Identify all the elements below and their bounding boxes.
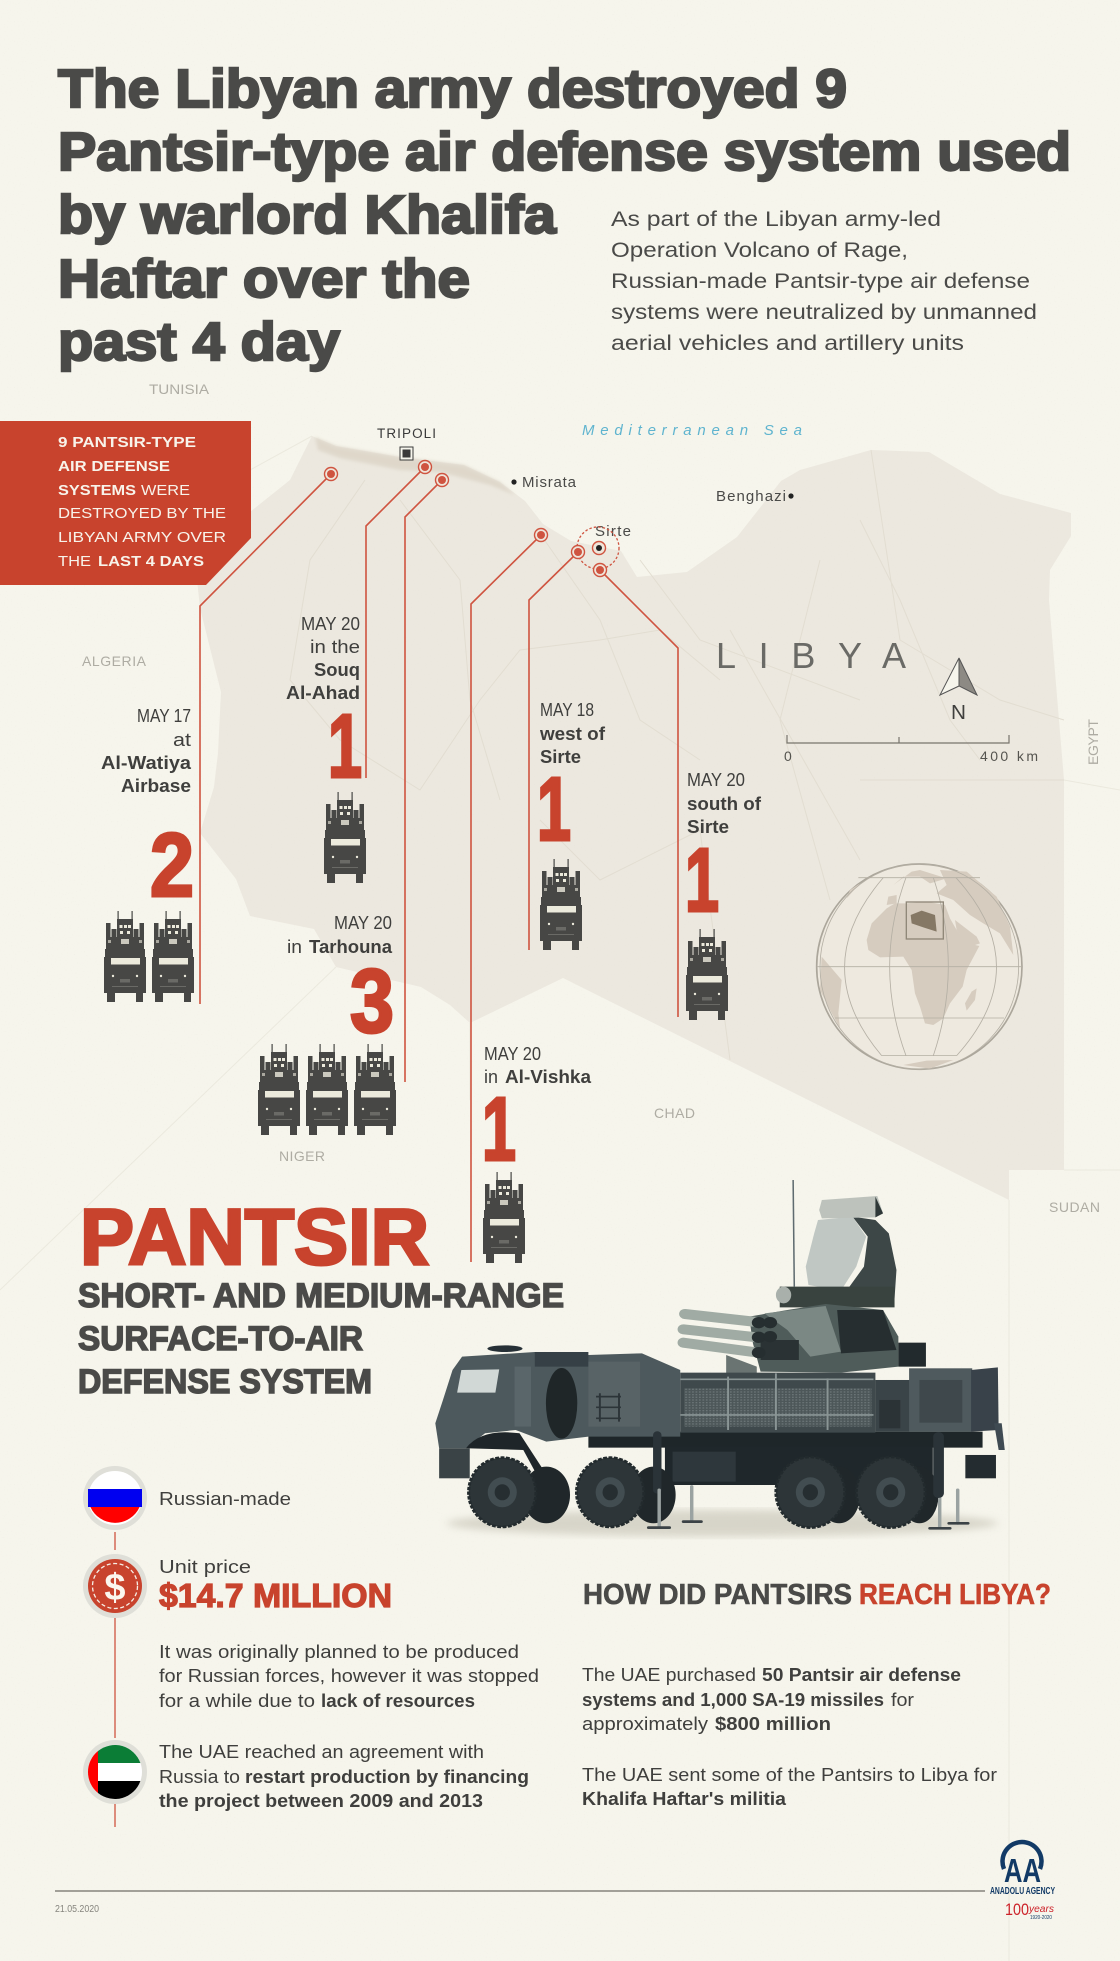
callout: destroyed systems: LIBYAN ARMY OVER — [58, 529, 226, 546]
map place labels: ALGERIA — [82, 653, 147, 669]
map place labels: Mediterranean Sea — [582, 422, 802, 439]
event: south of Sirte: south of — [687, 794, 762, 814]
icon: Russian flag — [83, 1466, 147, 1530]
radar — [776, 1180, 896, 1307]
text block: UAE agreement: The UAE reached an agreement with — [159, 1742, 484, 1762]
subtitle text: aerial vehicles and artillery units — [611, 332, 964, 355]
event: west of Sirte: Sirte — [540, 747, 581, 767]
heading: Pantsir: SHORT- AND MEDIUM-RANGE — [78, 1277, 564, 1315]
map place labels: Misrata — [522, 474, 577, 491]
label: Tunisia: TUNISIA — [149, 381, 210, 397]
map place labels: Benghazi — [716, 488, 786, 505]
text block: production history: lack of resources — [321, 1691, 475, 1711]
subtitle text — [611, 208, 1037, 355]
scale bar: 0 — [784, 748, 792, 764]
text block: UAE purchase: 50 Pantsir air defense — [762, 1665, 961, 1685]
heading: Pantsir: PANTSIR — [80, 1192, 429, 1281]
turret — [726, 1304, 926, 1373]
text block: production history: for Russian forces, however it was stopped — [159, 1666, 539, 1686]
callout: destroyed systems: 9 PANTSIR-TYPE — [58, 434, 196, 451]
text block: production history: It was originally planned to be produced — [159, 1642, 519, 1662]
icon: dollar coin: $ — [104, 1567, 126, 1609]
callout: destroyed systems — [0, 421, 251, 585]
text block: production history — [159, 1642, 539, 1711]
event: Tarhouna: in — [287, 937, 302, 957]
event: Al-Vishka: 1 — [482, 1080, 516, 1180]
heading: Pantsir: SURFACE-TO-AIR — [78, 1320, 363, 1358]
wheels — [469, 1457, 939, 1528]
heading: Pantsir: DEFENSE SYSTEM — [78, 1363, 372, 1401]
callout: destroyed systems: LAST 4 DAYS — [98, 553, 204, 570]
event: Souq Al-Ahad: Souq — [314, 660, 360, 680]
callout: destroyed systems: AIR DEFENSE — [58, 458, 170, 475]
title: Pantsir-type air defense system used — [58, 122, 1071, 182]
label: Russian-made: Russian-made — [159, 1489, 291, 1509]
text block: UAE sent Pantsirs — [582, 1765, 997, 1809]
text block: UAE purchase: $800 million — [715, 1714, 831, 1734]
footer: 21.05.2020 — [55, 1904, 99, 1915]
subtitle text: systems were neutralized by unmanned — [611, 301, 1037, 324]
title: The Libyan army destroyed 9 — [58, 59, 847, 119]
callout: destroyed systems: THE — [58, 553, 91, 570]
event: south of Sirte — [685, 770, 762, 1020]
heading: how did Pantsirs reach Libya — [583, 1579, 1051, 1611]
icon: north arrow: N — [951, 702, 966, 724]
map place labels: SUDAN — [1049, 1199, 1100, 1215]
missile launcher ends — [752, 1317, 777, 1358]
event: Souq Al-Ahad — [286, 614, 366, 883]
timeline connector — [114, 1532, 116, 1827]
unit price: Unit price — [159, 1557, 251, 1577]
event: Tarhouna: MAY 20 — [334, 913, 392, 933]
event: south of Sirte: 1 — [685, 831, 719, 931]
event: south of Sirte: Sirte — [687, 817, 729, 837]
map place labels: TRIPOLI — [377, 426, 436, 441]
event: Al-Watiya Airbase: 2 — [150, 816, 194, 916]
event: west of Sirte: west of — [539, 724, 606, 744]
icon: dollar coin — [83, 1554, 147, 1618]
event: south of Sirte: MAY 20 — [687, 770, 745, 790]
event: Al-Vishka: in — [484, 1067, 498, 1087]
missile tubes — [683, 1314, 757, 1352]
map place labels — [82, 422, 1101, 1215]
map place labels: Sirte — [595, 523, 631, 540]
scale bar — [784, 735, 1038, 764]
map place labels: EGYPT — [1085, 719, 1101, 765]
title: past 4 day — [58, 312, 340, 372]
title: Haftar over the — [58, 249, 470, 309]
chassis — [588, 1432, 983, 1448]
logo: Anadolu Agency: 100 — [1005, 1900, 1029, 1919]
map place labels: LIBYA — [716, 635, 906, 676]
map place labels: CHAD — [654, 1105, 695, 1121]
text block: UAE purchase: approximately — [582, 1714, 708, 1734]
event: Al-Watiya Airbase: MAY 17 — [137, 706, 191, 726]
map place labels: NIGER — [279, 1148, 325, 1164]
text block: UAE agreement: restart production by financing — [245, 1767, 529, 1787]
event: Al-Vishka — [482, 1044, 592, 1263]
icon: north arrow — [940, 658, 977, 724]
event: west of Sirte: 1 — [537, 760, 571, 860]
event: Tarhouna: Tarhouna — [309, 937, 393, 957]
callout: destroyed systems: SYSTEMS — [58, 482, 136, 499]
event: Souq Al-Ahad: Al-Ahad — [286, 683, 360, 703]
event: Al-Watiya Airbase: Al-Watiya — [101, 753, 192, 773]
text block: UAE agreement: Russia to — [159, 1767, 240, 1787]
cab — [435, 1345, 680, 1483]
text block: UAE purchase: systems and 1,000 SA-19 missiles — [582, 1690, 884, 1710]
title — [58, 59, 1071, 372]
callout: destroyed systems: WERE — [141, 482, 190, 499]
event: Al-Vishka: Al-Vishka — [505, 1067, 592, 1087]
text block: production history: for a while due to — [159, 1691, 315, 1711]
heading: how did Pantsirs reach Libya: HOW DID PANTSIRS — [583, 1579, 852, 1611]
heading: how did Pantsirs reach Libya: REACH LIBYA? — [859, 1579, 1051, 1611]
scale bar: 400 km — [980, 748, 1038, 764]
icon: UAE flag — [83, 1740, 147, 1804]
event: Al-Vishka: MAY 20 — [484, 1044, 541, 1064]
globe locator — [817, 864, 1022, 1069]
unit price: $14.7 MILLION — [159, 1577, 392, 1614]
event: Tarhouna: 3 — [350, 952, 394, 1052]
event: Tarhouna — [258, 913, 396, 1135]
event: west of Sirte — [537, 700, 606, 950]
logo: Anadolu Agency — [990, 1842, 1055, 1921]
event: Souq Al-Ahad: 1 — [328, 697, 362, 797]
logo: Anadolu Agency: AA — [1004, 1852, 1041, 1889]
cargo bed — [680, 1367, 1005, 1450]
unit price — [159, 1557, 392, 1614]
text block: UAE sent Pantsirs: Khalifa Haftar's militia — [582, 1789, 787, 1809]
text block: UAE purchase: for — [891, 1690, 914, 1710]
event: Al-Watiya Airbase — [101, 706, 194, 1002]
event: Souq Al-Ahad: MAY 20 — [301, 614, 360, 634]
leader lines and location pins — [200, 460, 678, 1262]
text block: UAE agreement: the project between 2009 and 2013 — [159, 1791, 483, 1811]
logo: Anadolu Agency: years — [1028, 1904, 1054, 1915]
text block: UAE agreement — [159, 1742, 529, 1811]
subtitle text: Russian-made Pantsir-type air defense — [611, 270, 1030, 293]
logo: Anadolu Agency: 1920-2020 — [1030, 1915, 1052, 1921]
heading: Pantsir — [78, 1192, 564, 1401]
event: west of Sirte: MAY 18 — [540, 700, 594, 720]
title: by warlord Khalifa — [58, 185, 557, 245]
text block: UAE purchase: The UAE purchased — [582, 1665, 756, 1685]
callout: destroyed systems: DESTROYED BY THE — [58, 505, 226, 522]
text block: UAE purchase — [582, 1665, 961, 1734]
illustration: Pantsir vehicle — [435, 1180, 1005, 1537]
event: Al-Watiya Airbase: Airbase — [121, 776, 191, 796]
text block: UAE sent Pantsirs: The UAE sent some of the Pantsirs to Libya for — [582, 1765, 997, 1785]
subtitle text: As part of the Libyan army-led — [611, 208, 941, 231]
logo: Anadolu Agency: ANADOLU AGENCY — [990, 1885, 1055, 1897]
subtitle text: Operation Volcano of Rage, — [611, 239, 908, 262]
event: Souq Al-Ahad: in the — [310, 637, 360, 657]
outriggers — [648, 1435, 968, 1528]
event: Al-Watiya Airbase: at — [173, 730, 191, 750]
